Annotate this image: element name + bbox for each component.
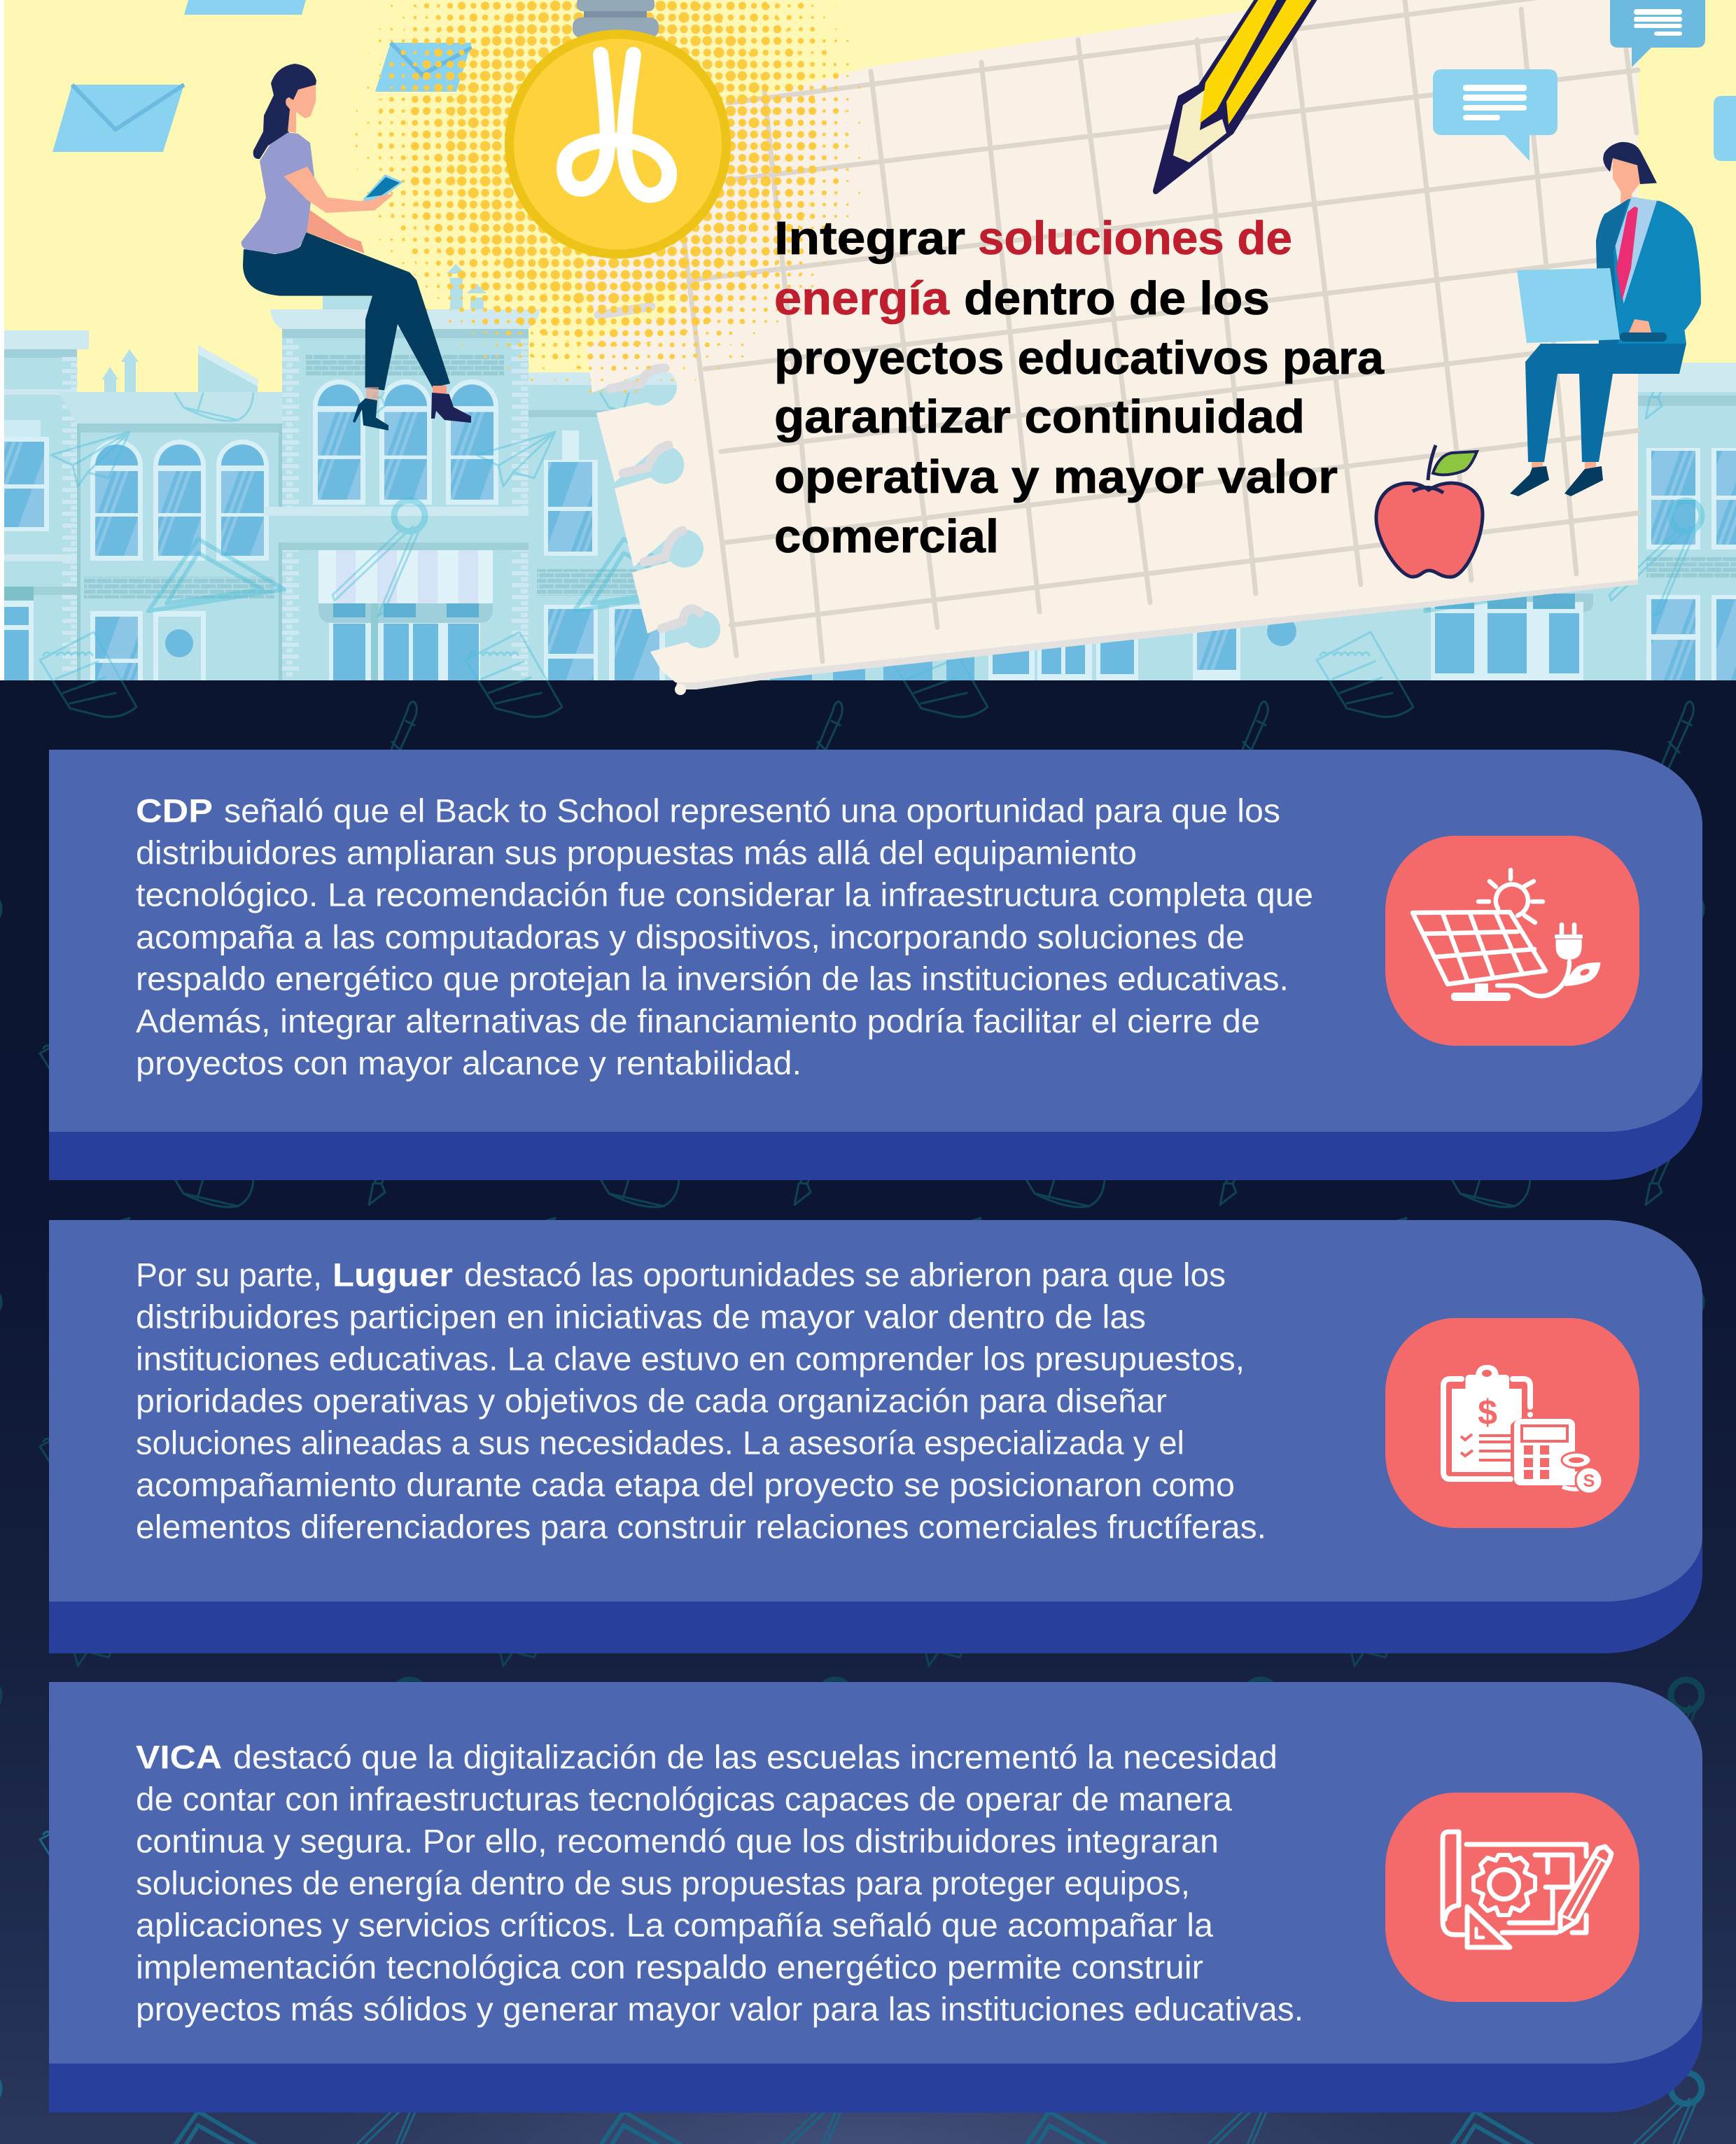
speech bubble 1 <box>1433 69 1558 161</box>
title: soluciones de <box>978 212 1292 265</box>
panel text: Por su parte, <box>136 1256 322 1294</box>
panel text: prioridades operativas y objetivos de cada organización para diseñar <box>136 1382 1167 1420</box>
panel depth <box>49 1435 1702 1653</box>
bulb socket <box>573 0 659 38</box>
panel text: Además, integrar alternativas de financiamiento podría facilitar el cierre de <box>136 1002 1260 1039</box>
title: garantizar continuidad <box>774 391 1305 443</box>
panel text: señaló que el Back to School representó una oportunidad para que los <box>224 792 1280 829</box>
page background <box>0 680 1736 2144</box>
panel depth <box>49 980 1702 1180</box>
panel: CDP <box>49 750 1702 1180</box>
panel text: soluciones de energía dentro de sus propuestas para proteger equipos, <box>136 1865 1190 1901</box>
title <box>774 212 1385 563</box>
title: energía <box>774 272 950 325</box>
panel text: proyectos con mayor alcance y rentabilidad. <box>136 1044 802 1081</box>
right-hand buildings <box>528 363 1736 680</box>
windows: second building <box>90 440 269 680</box>
header illustration <box>0 0 1736 695</box>
icon: envelope large <box>52 85 184 152</box>
title: proyectos educativos para <box>774 332 1385 384</box>
panel text: distribuidores participen en iniciativas de mayor valor dentro de las <box>136 1298 1146 1336</box>
title: Integrar <box>774 212 965 265</box>
panel text <box>136 1256 1266 1546</box>
panel text: implementación tecnológica con respaldo energético permite construir <box>136 1949 1203 1985</box>
panel text: distribuidores ampliaran sus propuestas más allá del equipamiento <box>136 834 1137 871</box>
panel text: destacó que la digitalización de las escuelas incrementó la necesidad <box>233 1739 1278 1775</box>
panel face <box>49 1682 1702 2064</box>
pencil <box>1153 0 1319 194</box>
panel text: acompaña a las computadoras y dispositivos, incorporando soluciones de <box>136 918 1245 955</box>
panel: VICA <box>49 1682 1702 2113</box>
panel text: tecnológico. La recomendación fue considerar la infraestructura completa que <box>136 876 1313 913</box>
icon: budget clipboard and calculator: $ <box>1478 1393 1497 1432</box>
sky <box>0 0 1736 680</box>
icon: envelope top <box>184 0 306 15</box>
icon: budget clipboard and calculator <box>1385 1318 1639 1528</box>
title: dentro de los <box>964 272 1270 325</box>
central building <box>265 264 545 680</box>
icon: envelope small <box>375 43 472 92</box>
panel depth <box>49 1890 1702 2113</box>
panel: Luguer <box>49 1220 1702 1653</box>
title: operativa y mayor valor <box>774 451 1338 503</box>
paper hole curls <box>598 307 700 629</box>
panel text <box>136 1739 1303 2027</box>
speech bubble 3 <box>1714 96 1736 161</box>
filament <box>564 55 669 195</box>
apple <box>1376 445 1483 577</box>
panel text: continua y segura. Por ello, recomendó que los distribuidores integraran <box>136 1823 1219 1859</box>
speech bubble 2 <box>1610 0 1705 67</box>
paper grid <box>684 0 1638 661</box>
panel text: proyectos más sólidos y generar mayor valor para las instituciones educativas. <box>136 1991 1303 2027</box>
panel face <box>49 750 1702 1132</box>
panel text <box>136 792 1313 1081</box>
panel text: instituciones educativas. La clave estuvo en comprender los presupuestos, <box>136 1340 1245 1378</box>
man with laptop <box>1510 142 1701 496</box>
panel text: elementos diferenciadores para construir relaciones comerciales fructíferas. <box>136 1508 1266 1546</box>
panel text: Luguer <box>332 1256 453 1294</box>
icon: blueprint with gear and pencil <box>1385 1793 1639 2002</box>
panel text: soluciones alineadas a sus necesidades. La asesoría especializada y el <box>136 1424 1184 1462</box>
icon: solar panel with plug <box>1385 836 1639 1046</box>
light bulb <box>510 0 727 254</box>
panel text: CDP <box>136 792 213 829</box>
faint school doodles over buildings <box>4 392 1736 680</box>
panel text: respaldo energético que protejan la inversión de las instituciones educativas. <box>136 960 1289 997</box>
woman sitting <box>241 64 471 430</box>
windows: left building <box>4 420 77 680</box>
panel text: aplicaciones y servicios críticos. La compañía señaló que acompañar la <box>136 1907 1214 1943</box>
title: comercial <box>774 510 999 563</box>
panel face <box>49 1220 1702 1602</box>
panel text: acompañamiento durante cada etapa del proyecto se posicionaron como <box>136 1466 1235 1504</box>
halftone dots <box>355 0 870 394</box>
icon: budget clipboard and calculator: S <box>1583 1471 1595 1491</box>
panel text: destacó las oportunidades se abrieron para que los <box>464 1256 1226 1294</box>
buildings <box>4 264 1736 680</box>
panel text: VICA <box>136 1739 222 1775</box>
notebook paper <box>578 0 1638 695</box>
panel text: de contar con infraestructuras tecnológicas capaces de operar de manera <box>136 1781 1233 1817</box>
